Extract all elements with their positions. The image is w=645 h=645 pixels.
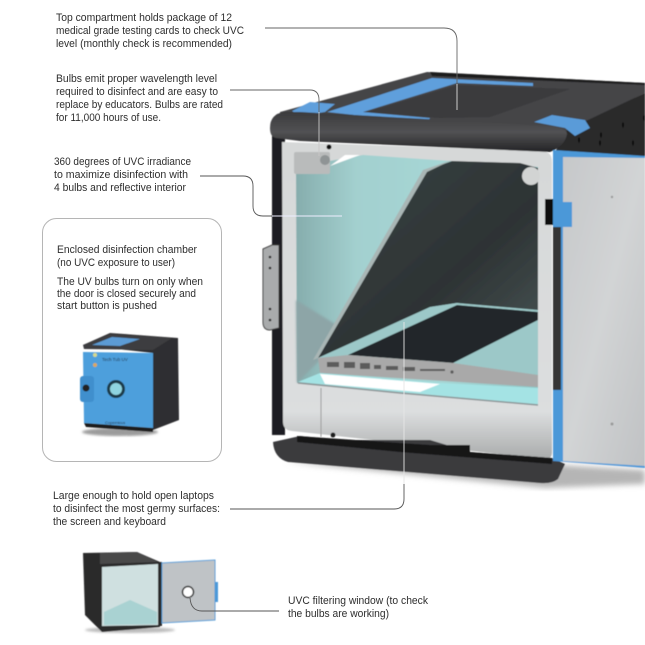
callout: top compartment: Top compartment holds package of 12 xyxy=(56,12,232,24)
panel text: The UV bulbs turn on only when xyxy=(57,276,203,288)
bulb right xyxy=(522,167,540,185)
callout: large enough for laptops: the screen and keyboard xyxy=(53,516,166,528)
panel text xyxy=(57,244,203,312)
main device: open disinfection chamber xyxy=(263,72,645,488)
callout: top compartment: level (monthly check is recommended) xyxy=(56,38,232,50)
corner latches xyxy=(292,102,335,116)
floor shadow xyxy=(285,462,645,488)
base xyxy=(273,436,565,483)
open unit illustration xyxy=(83,552,218,633)
screen silver edge xyxy=(313,160,452,360)
callout: large enough for laptops: to disinfect the most germy surfaces: xyxy=(53,503,220,515)
callout: 360 degrees: 360 degrees of UVC irradiance xyxy=(54,156,191,168)
laptop deck xyxy=(318,303,538,375)
bright tray below laptop xyxy=(298,373,538,405)
panel text: the door is closed securely and xyxy=(57,288,196,300)
dark screen xyxy=(318,161,538,358)
callout: bulbs: required to disinfect and are easy to xyxy=(56,86,218,98)
callout: large enough for laptops: Large enough to hold open laptops xyxy=(53,490,214,502)
panel text: Enclosed disinfection chamber xyxy=(57,244,197,256)
left edge post xyxy=(272,130,285,435)
callout: bulbs: replace by educators. Bulbs are rated xyxy=(56,99,223,111)
vertical seam xyxy=(320,388,322,437)
top surface xyxy=(280,72,645,132)
callout: UVC filtering window xyxy=(190,595,428,620)
right side wall xyxy=(555,93,645,160)
side handle xyxy=(263,245,279,330)
closed unit illustration: Copernicus xyxy=(105,420,125,425)
callout: large enough for laptops xyxy=(53,322,404,528)
callout: 360 degrees xyxy=(54,156,342,216)
keyboard xyxy=(348,305,538,363)
laptop front edge with ports xyxy=(318,355,538,387)
closed unit illustration: Tech Tub UV xyxy=(102,357,128,362)
closed unit illustration xyxy=(80,333,179,436)
door xyxy=(553,150,645,468)
callout: top compartment xyxy=(56,12,457,110)
callout: UVC filtering window: UVC filtering window (to check xyxy=(288,595,428,607)
interior frame xyxy=(282,142,552,459)
panel text: (no UVC exposure to user) xyxy=(57,257,175,269)
callout: bulbs: Bulbs emit proper wavelength level xyxy=(56,73,217,85)
bulb left xyxy=(294,152,360,174)
callout: bulbs: for 11,000 hours of use. xyxy=(56,112,161,124)
panel: enclosed disinfection chamber xyxy=(42,218,222,462)
panel text: start button is pushed xyxy=(57,300,157,312)
chamber opening: left reflective wall xyxy=(296,155,538,405)
top compartment frame xyxy=(327,78,533,123)
callout: UVC filtering window: the bulbs are working) xyxy=(288,608,389,620)
callout: 360 degrees: to maximize disinfection with xyxy=(54,169,188,181)
callout: bulbs xyxy=(56,73,319,156)
callout: 360 degrees: 4 bulbs and reflective interior xyxy=(54,182,186,194)
door hinge xyxy=(545,199,553,225)
callout: top compartment: medical grade testing cards to check UVC xyxy=(56,25,244,37)
top bezel xyxy=(270,112,567,152)
top compartment lid xyxy=(367,85,570,118)
